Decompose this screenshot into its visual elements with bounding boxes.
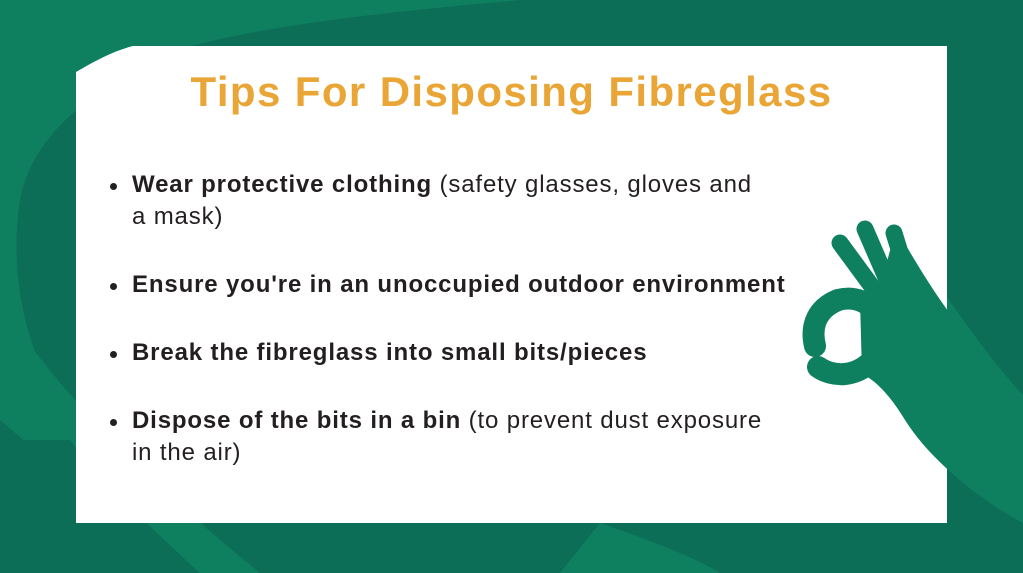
tip 4: Dispose of the bits in a bin (to prevent dust exposure xyxy=(132,407,762,434)
tip 1: Wear protective clothing (safety glasses, gloves and xyxy=(132,171,752,198)
tip 4: in the air) xyxy=(132,439,241,466)
tip 4 xyxy=(132,405,832,469)
bullet list xyxy=(110,171,786,466)
tip 1: a mask) xyxy=(132,203,223,230)
tip 2: Ensure you're in an unoccupied outdoor environment xyxy=(132,271,786,298)
tip 1 xyxy=(132,169,832,233)
panel: white card xyxy=(76,46,947,523)
title: Tips For Disposing Fibreglass xyxy=(191,68,832,115)
tip 3: Break the fibreglass into small bits/pieces xyxy=(132,339,647,366)
